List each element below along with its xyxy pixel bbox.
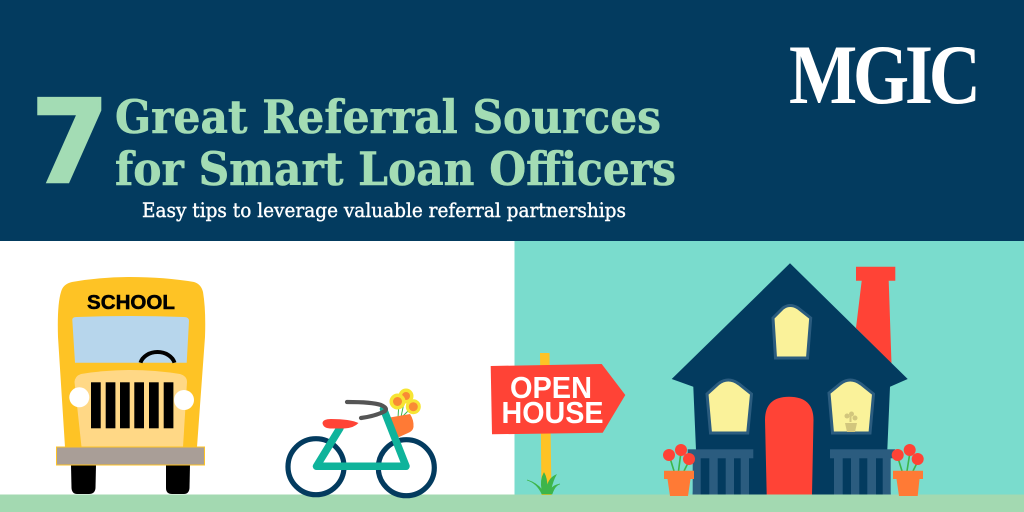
steering wheel bbox=[140, 352, 174, 363]
stems bbox=[898, 452, 918, 471]
flower stems bbox=[398, 398, 412, 418]
saddle bbox=[322, 419, 358, 428]
bus body bbox=[58, 277, 205, 447]
logo: MGIC: MGIC bbox=[789, 29, 977, 122]
basket bbox=[387, 414, 414, 438]
pot bbox=[893, 471, 923, 496]
title bbox=[115, 90, 676, 196]
upper window bbox=[773, 306, 811, 358]
icon: open house sign bbox=[491, 353, 625, 495]
bus sign text: SCHOOL bbox=[87, 292, 175, 314]
right window bbox=[829, 380, 874, 433]
subtitle: Easy tips to leverage valuable referral partnerships bbox=[142, 199, 626, 222]
sign text: HOUSE bbox=[502, 395, 604, 430]
panel: navy header bbox=[0, 0, 1024, 241]
icon: right flower pot bbox=[892, 444, 924, 496]
house body and roof bbox=[672, 263, 908, 494]
blossoms bbox=[892, 444, 924, 465]
bus wheels bbox=[71, 465, 190, 494]
window plant bbox=[844, 412, 858, 432]
bus bumper bbox=[56, 447, 204, 465]
panel: teal right background bbox=[514, 241, 1024, 496]
sign post bbox=[540, 353, 552, 495]
blossoms bbox=[663, 444, 695, 465]
left porch bbox=[688, 449, 753, 494]
icon: school bus bbox=[56, 277, 205, 494]
bus windshield bbox=[72, 316, 189, 363]
sign text: OPEN bbox=[510, 370, 592, 405]
front door bbox=[765, 397, 814, 494]
bus grille bbox=[91, 382, 173, 428]
icon: left flower pot bbox=[663, 444, 695, 496]
panel: white left background bbox=[0, 241, 515, 496]
ground strip bbox=[0, 494, 1024, 512]
stems bbox=[670, 452, 689, 471]
sign text bbox=[502, 370, 604, 430]
title: Great Referral Sources bbox=[115, 90, 661, 144]
chimney bbox=[856, 267, 895, 364]
title: for Smart Loan Officers bbox=[115, 142, 676, 196]
handlebar bbox=[347, 402, 386, 418]
frame bbox=[316, 409, 406, 466]
left window bbox=[707, 380, 752, 433]
icon: house bbox=[672, 263, 908, 494]
grass bbox=[527, 473, 560, 494]
wheels bbox=[288, 439, 434, 496]
pot bbox=[664, 471, 694, 496]
big number 7: 7 bbox=[31, 76, 109, 210]
right porch bbox=[830, 449, 895, 494]
bus hood bbox=[74, 370, 187, 447]
icon: bicycle bbox=[288, 388, 434, 496]
bus headlights bbox=[69, 387, 194, 410]
flowers bbox=[390, 388, 421, 414]
sign board bbox=[491, 364, 625, 434]
